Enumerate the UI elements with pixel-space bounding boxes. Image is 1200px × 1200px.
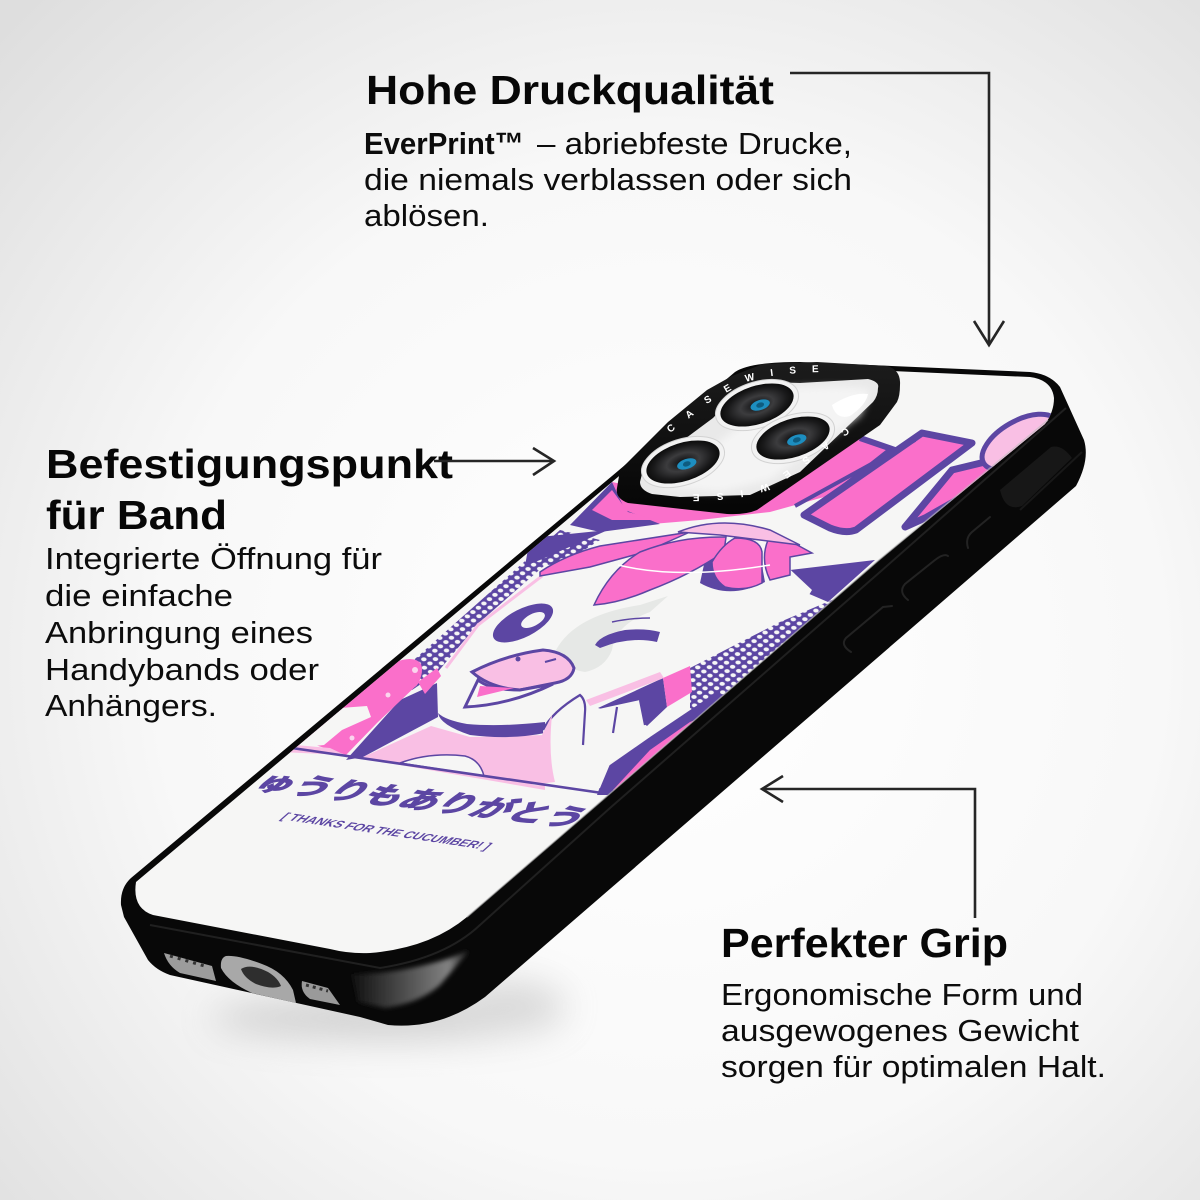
strawberry and hand: [300, 659, 422, 755]
body text: [45, 541, 382, 723]
wink: [595, 629, 660, 648]
body text: ausgewogenes Gewicht: [721, 1013, 1079, 1048]
heading: [46, 441, 453, 538]
pink blocks: [612, 438, 892, 525]
heading: Befestigungspunkt: [46, 441, 453, 487]
callout: Hohe Druckqualität: [364, 67, 852, 233]
camera island: [616, 362, 900, 514]
printed artwork: [209, 403, 1067, 852]
bottom speaker right: [302, 981, 340, 1005]
USB port: [221, 956, 296, 1003]
body text: ablösen.: [364, 198, 489, 233]
body text: die einfache: [45, 578, 233, 613]
side buttons: [844, 517, 990, 652]
arrow: to phone side: [762, 776, 975, 918]
body text: – abriebfeste Drucke,: [537, 126, 852, 161]
body and collar: [363, 726, 545, 790]
island outer ring: [617, 362, 900, 514]
body text: Handybands oder: [45, 652, 319, 687]
lens left: [635, 427, 731, 497]
english caption: [ THANKS FOR THE CUCUMBER! ]: [277, 811, 495, 852]
phone case: [120, 362, 1086, 1026]
scarf: [598, 678, 667, 726]
body text: Anhängers.: [45, 688, 217, 723]
beak: [472, 650, 574, 690]
plate edge soft gray highlight: [467, 420, 1048, 917]
head edge tint: [446, 576, 542, 668]
eye: [492, 604, 554, 642]
arrow: top to phone corner: [790, 73, 1004, 345]
heading: für Band: [46, 492, 227, 538]
island logo text upper: CASEWISE: [667, 365, 818, 432]
arm bump: [400, 755, 484, 776]
arrow: to lanyard point: [434, 448, 554, 475]
white back plate: [135, 366, 1054, 953]
lower right shapes: [597, 690, 720, 795]
heading: Hohe Druckqualität: [366, 67, 774, 113]
body text: EverPrint™: [364, 126, 524, 161]
lens right: [745, 403, 841, 473]
hand: [532, 695, 650, 788]
hair: [540, 523, 812, 605]
purple wedge right: [790, 560, 875, 602]
body text: die niemals verblassen oder sich: [364, 162, 852, 197]
head: [470, 564, 812, 632]
body text: Anbringung eines: [45, 615, 313, 650]
bottom corner reflection: [352, 950, 470, 1008]
japanese text: きゅうりもありがとう: [209, 764, 597, 832]
bottom speaker left: [164, 953, 216, 981]
purple wedge behind hair: [526, 531, 606, 564]
body text: Ergonomische Form und: [721, 977, 1083, 1012]
heading: Perfekter Grip: [721, 920, 1008, 966]
halftone right: [690, 600, 834, 718]
magnetic ring shadow: [556, 596, 668, 672]
case body: [121, 362, 1086, 1026]
divider line: [285, 747, 602, 793]
side window: [1000, 446, 1072, 507]
body text: Integrierte Öffnung für: [45, 541, 382, 576]
lens top: [709, 370, 805, 440]
body text: [721, 977, 1106, 1084]
side frame shading: [150, 408, 1082, 968]
body text: sorgen für optimalen Halt.: [721, 1049, 1106, 1084]
drop shadow under phone: [210, 981, 565, 1040]
callout: Befestigungspunkt: [45, 441, 453, 723]
island window: [640, 379, 878, 497]
halftone left: [412, 530, 600, 690]
island logo text lower: CASEWISE: [693, 428, 849, 502]
callout: Perfekter Grip: [721, 920, 1106, 1084]
body text: [364, 126, 852, 233]
